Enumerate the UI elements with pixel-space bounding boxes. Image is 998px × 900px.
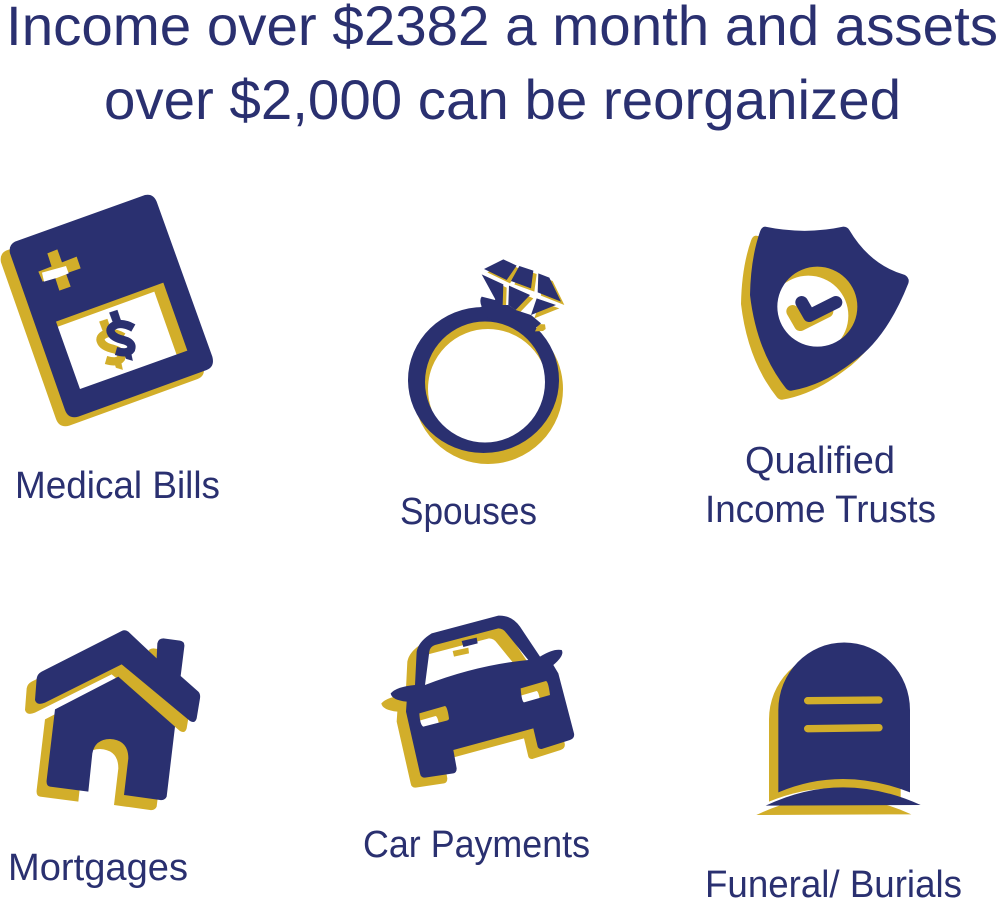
icon: shield with check	[741, 227, 909, 400]
plus sign	[38, 249, 81, 291]
inscription lines	[808, 700, 879, 729]
label: qualified income trusts: Income Trusts	[705, 489, 936, 531]
ring	[408, 307, 559, 453]
label: spouses: Spouses	[400, 491, 537, 533]
diamond	[475, 259, 564, 331]
title: over $2,000 can be reorganized	[104, 68, 901, 131]
icon: tombstone	[756, 642, 921, 815]
label: mortgages: Mortgages	[8, 847, 188, 889]
item: spouses	[400, 259, 564, 533]
icon: car	[381, 616, 574, 788]
icon: medical bill	[1, 195, 213, 426]
item: medical bills	[1, 195, 220, 507]
label: car payments: Car Payments	[363, 824, 590, 866]
ring gold shadow	[420, 322, 556, 456]
item: car payments	[363, 616, 590, 866]
item: qualified income trusts	[705, 227, 936, 531]
item: funeral burials	[705, 642, 962, 900]
label: qualified income trusts: Qualified	[745, 440, 895, 482]
label: medical bills: Medical Bills	[15, 465, 220, 507]
label: qualified income trusts	[705, 440, 936, 531]
item: mortgages	[8, 630, 200, 889]
rear-view mirror	[462, 638, 478, 647]
title	[6, 0, 998, 131]
icon: house	[25, 630, 200, 810]
dollar sign	[99, 310, 133, 370]
check mark	[802, 302, 836, 316]
icon: diamond ring	[408, 259, 564, 456]
